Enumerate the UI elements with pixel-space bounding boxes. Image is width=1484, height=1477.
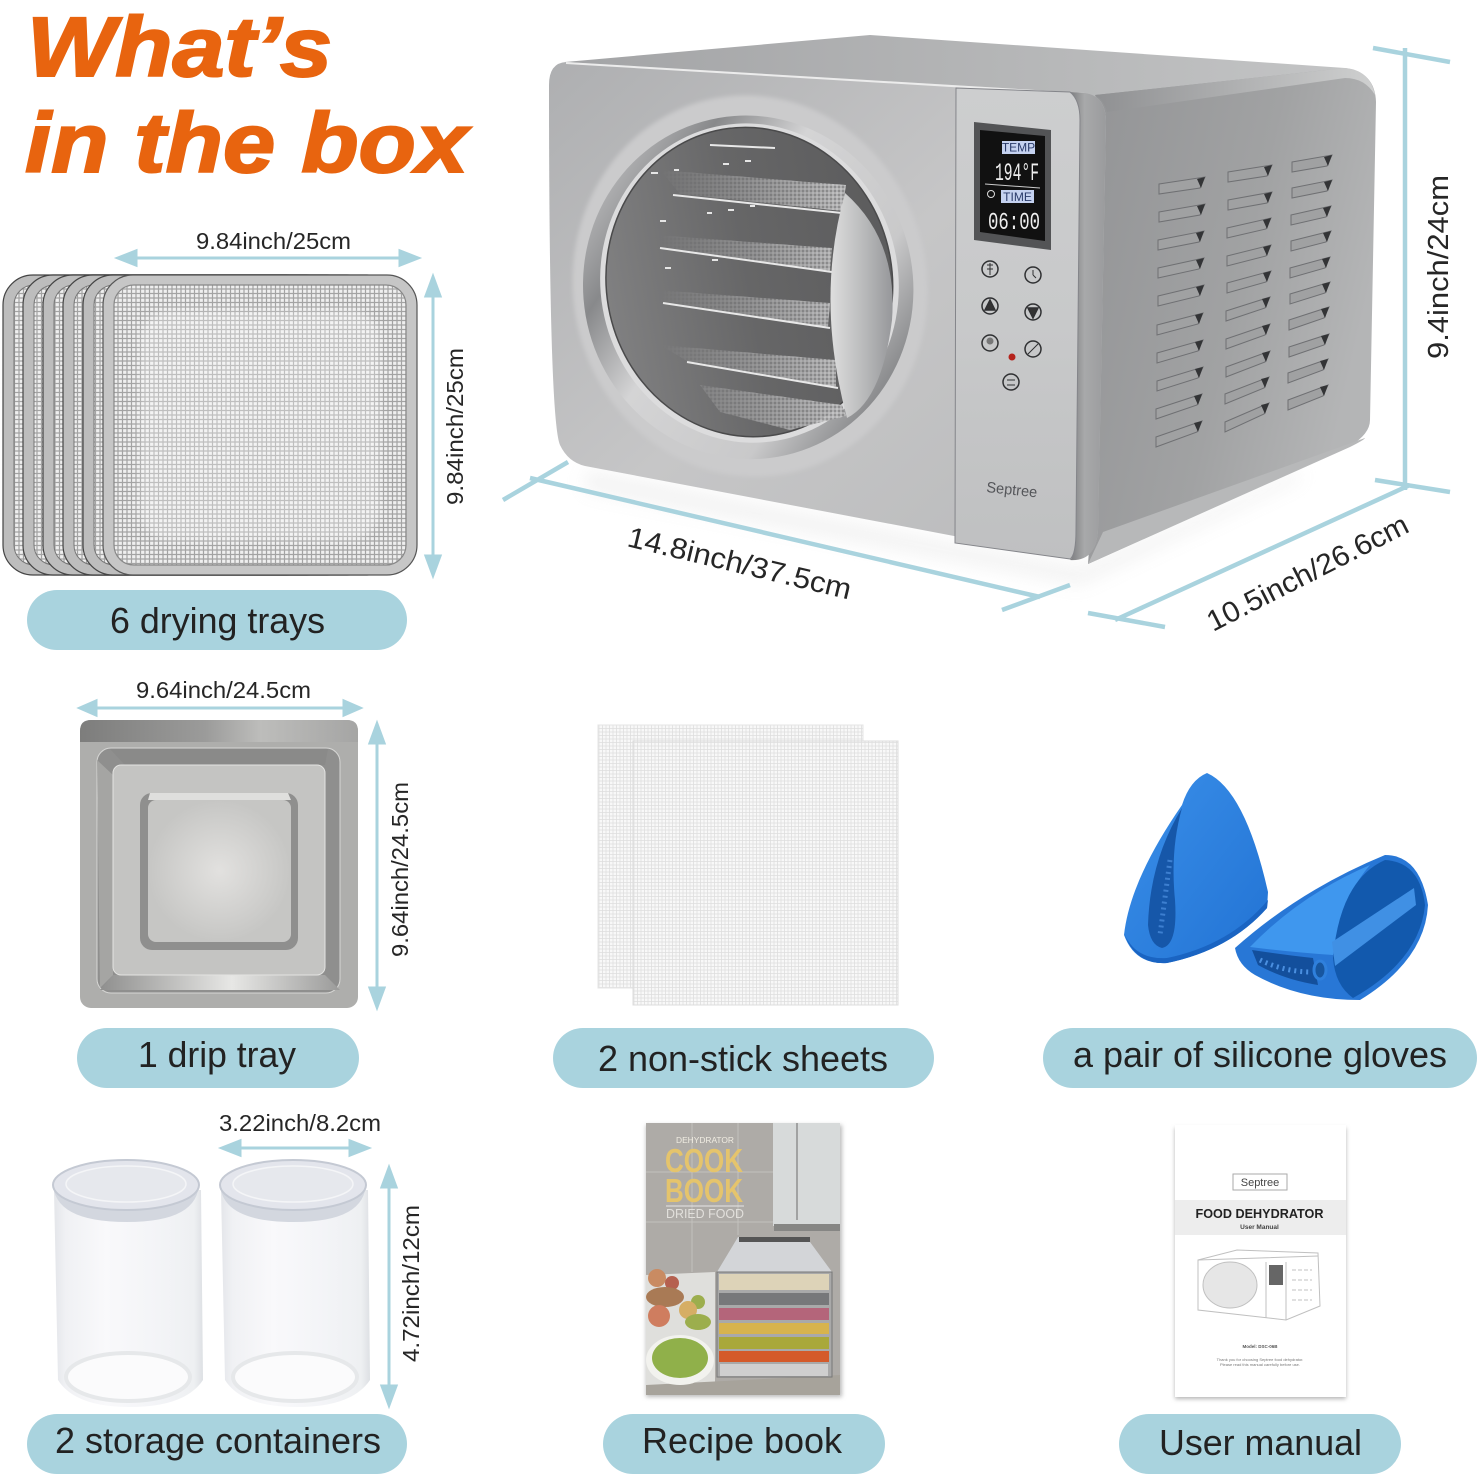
- label: oven depth: 10.5inch/26.6cm: [1202, 509, 1414, 638]
- user manual: FOOD DEHYDRATOR: [1196, 1206, 1324, 1221]
- label: oven width: 14.8inch/37.5cm: [624, 522, 855, 606]
- user manual: [1175, 1125, 1346, 1399]
- label: drip tray height: 9.64inch/24.5cm: [387, 782, 413, 957]
- pill: a pair of silicone gloves: [1043, 1028, 1477, 1088]
- book dehydrator: [717, 1237, 832, 1272]
- oven top face: [565, 35, 1345, 97]
- oven side vents: [1156, 155, 1332, 447]
- label: oven height: 9.4inch/24cm: [1423, 175, 1455, 359]
- oven racks: [660, 145, 842, 388]
- pill: user manual: [1119, 1414, 1401, 1474]
- pill: 1 drip tray: 1 drip tray: [138, 1034, 296, 1075]
- oven side wrap: [1070, 92, 1106, 560]
- title: What’s: [27, 0, 332, 94]
- oven side face: [1088, 68, 1376, 564]
- rack mesh: [676, 172, 846, 430]
- pill: user manual: User manual: [1159, 1422, 1362, 1463]
- control buttons: [982, 261, 1041, 390]
- LCD display: TEMP: [1002, 140, 1035, 154]
- pill: a pair of silicone gloves: a pair of silicone gloves: [1073, 1034, 1447, 1075]
- recipe book: COOK: [665, 1142, 743, 1179]
- oven front face: [549, 62, 1106, 558]
- pill: 2 non-stick sheets: [553, 1028, 934, 1088]
- label: container width: 3.22inch/8.2cm: [219, 1110, 381, 1136]
- storage containers: [53, 1160, 370, 1407]
- label: tray height: 9.84inch/25cm: [442, 348, 468, 505]
- left glove: [1124, 773, 1268, 963]
- LCD display: TIME: [1003, 190, 1032, 204]
- container right: [220, 1160, 370, 1407]
- LCD display: 194°F: [995, 159, 1039, 188]
- pill: recipe book: Recipe book: [642, 1420, 843, 1461]
- user manual: User Manual: [1240, 1224, 1279, 1231]
- user manual: Septree: [1241, 1177, 1279, 1189]
- drip tray: [80, 720, 358, 1008]
- label: container height: 4.72inch/12cm: [398, 1205, 424, 1362]
- container left: [53, 1160, 203, 1407]
- oven control panel: [955, 88, 1080, 559]
- oven glass window: [651, 145, 893, 430]
- rack highlights: [651, 161, 755, 268]
- door reflection: [830, 193, 893, 418]
- recipe book: BOOK: [665, 1172, 743, 1209]
- pill: 1 drip tray: [77, 1028, 359, 1088]
- dimension arrows: drip tray: [80, 701, 384, 1007]
- panel: dehydrator oven: [543, 35, 1376, 585]
- silicone gloves: [1124, 773, 1428, 1000]
- recipe book: DRIED FOOD: [666, 1206, 744, 1221]
- title: in the box: [25, 96, 472, 190]
- pill: recipe book: [603, 1414, 885, 1474]
- manual oven drawing: [1198, 1250, 1320, 1320]
- pill: 2 storage containers: [27, 1414, 407, 1474]
- user manual: Please read this manual carefully before use.: [1220, 1362, 1300, 1367]
- drying trays: [3, 275, 417, 575]
- pill: 2 non-stick sheets: 2 non-stick sheets: [598, 1038, 888, 1079]
- label: drip tray width: 9.64inch/24.5cm: [136, 677, 311, 703]
- dimension arrows: trays: [118, 251, 440, 575]
- user manual: Model: DSC-06B: [1242, 1344, 1278, 1349]
- LCD display: 06:00: [988, 210, 1040, 237]
- dimension arrows: containers: [222, 1141, 396, 1405]
- non-stick sheets: [598, 725, 898, 1005]
- user manual: Thank you for choosing Septree food dehydrator.: [1217, 1357, 1303, 1362]
- pill: 2 storage containers: 2 storage containers: [55, 1420, 381, 1461]
- recipe book: DEHYDRATOR: [676, 1136, 734, 1145]
- oven door ring: [543, 67, 957, 505]
- LCD display: [974, 122, 1051, 250]
- dimensions: oven: [503, 48, 1450, 627]
- brand name: Septree: [986, 479, 1038, 501]
- recipe book: [646, 1123, 842, 1397]
- oven shadow: [585, 470, 1300, 585]
- pill: 6 drying trays: [27, 590, 407, 650]
- side bottom bevel: [1088, 438, 1365, 564]
- title: [25, 0, 472, 190]
- side top bevel: [1095, 68, 1375, 112]
- pill: 6 drying trays: 6 drying trays: [110, 600, 325, 641]
- right glove: [1235, 855, 1428, 1000]
- label: tray width: 9.84inch/25cm: [196, 228, 351, 254]
- book fruit: [648, 1269, 666, 1287]
